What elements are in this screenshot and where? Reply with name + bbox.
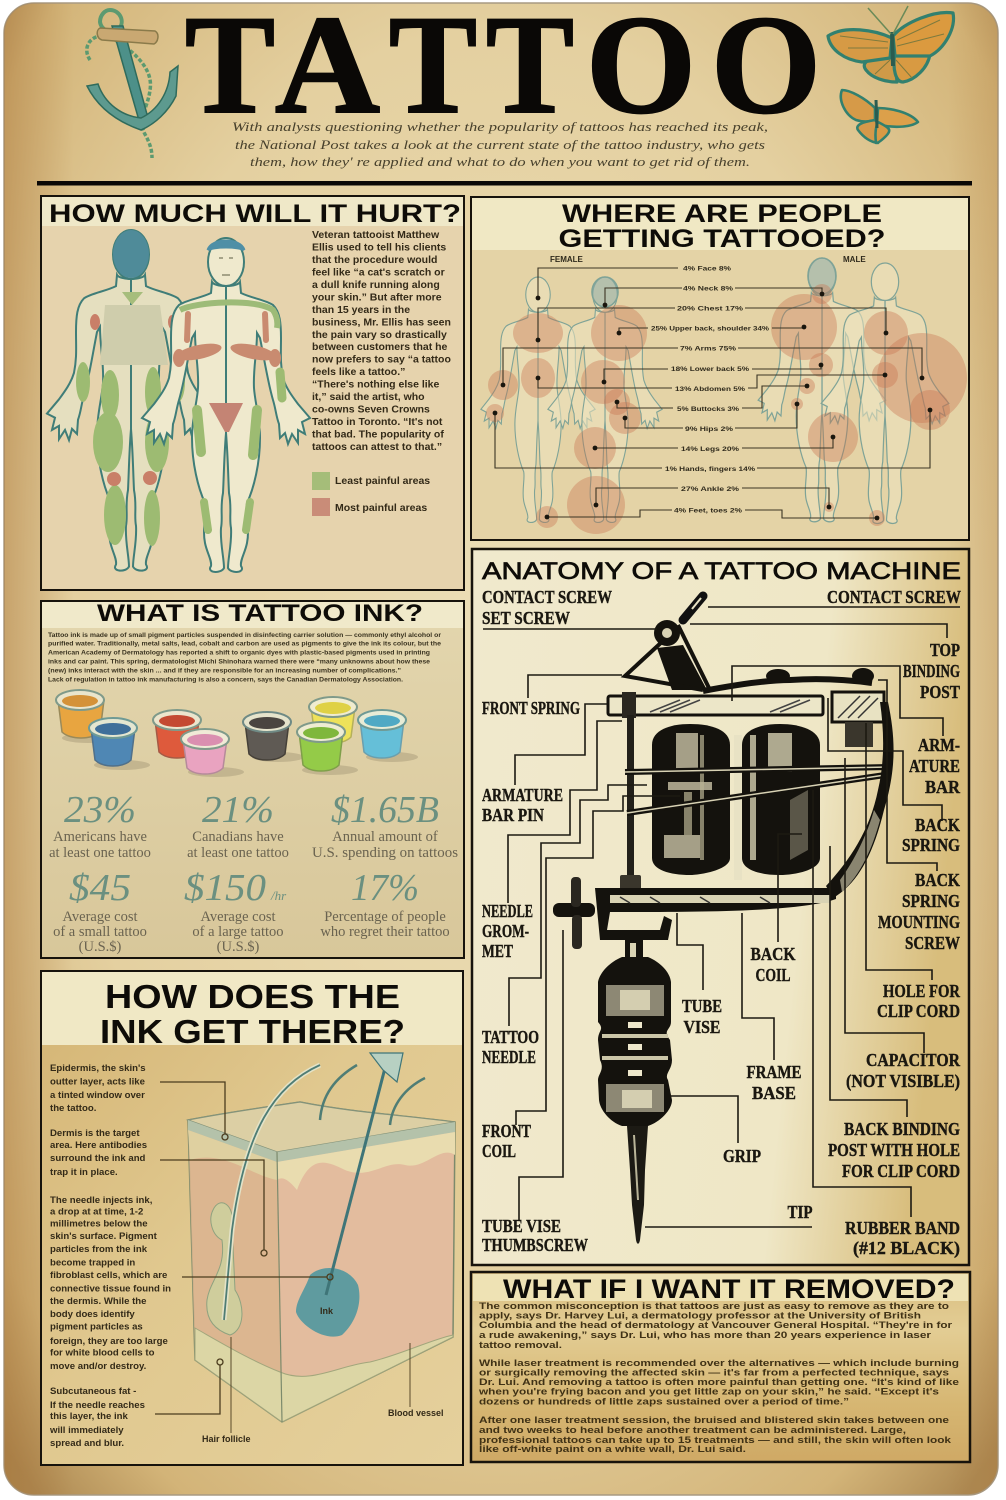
legend <box>312 472 430 516</box>
part labels: left: NEEDLE <box>482 901 533 921</box>
stat: 45 dollars <box>53 867 147 955</box>
removal text: Columbia and the head of dermatology at Vancouver General Hospital. “They're in for <box>479 1320 953 1330</box>
callout: skin layer descriptions: The needle injects ink, <box>50 1195 153 1206</box>
legend: Most painful areas <box>335 502 427 514</box>
callout: skin layer descriptions: this layer, the ink <box>50 1411 129 1422</box>
removal text: After one laser treatment session, the bruised and blistered skin takes between one <box>479 1415 949 1425</box>
icon: small butterfly <box>841 90 918 143</box>
text: veteran tattooist: between customers that he <box>312 341 448 353</box>
text: veteran tattooist: co-owns Seven Crowns <box>312 404 430 416</box>
tube stem <box>625 940 643 960</box>
part labels: right: SPRING <box>902 835 960 855</box>
part labels: right: CAPACITOR <box>866 1050 961 1070</box>
stat: 1.65 billion: U.S. spending on tattoos <box>312 845 458 861</box>
part labels: left <box>482 587 612 1255</box>
part labels: right: POST WITH HOLE <box>828 1140 960 1160</box>
callout: skin layer descriptions: a tinted window over <box>50 1090 145 1101</box>
callout: skin layer descriptions: trap it in place. <box>50 1167 118 1178</box>
callout: skin layer descriptions: surround the ink and <box>50 1153 146 1164</box>
part labels: right: BINDING <box>903 661 960 681</box>
part labels: right: (#12 BLACK) <box>853 1238 960 1259</box>
table labels: 4% Neck 8% <box>683 286 733 292</box>
pot: pink <box>181 729 244 777</box>
pot: cyan <box>358 710 418 762</box>
callout: skin layer descriptions: Epidermis, the skin's <box>50 1063 146 1074</box>
stat: 17 percent <box>320 867 450 940</box>
part labels: right: ATURE <box>909 756 960 776</box>
subtitle: With analysts questioning whether the popularity of tattoos has reached its peak, <box>232 119 768 134</box>
part labels: left: TUBE VISE <box>482 1216 561 1236</box>
text: veteran tattooist: tattoos can attest to that.” <box>312 441 442 453</box>
part labels: left: NEEDLE <box>482 1047 536 1067</box>
callout: skin layer descriptions: connective tissue found in <box>50 1284 171 1294</box>
callout: skin layer descriptions: millimetres below the <box>50 1218 148 1230</box>
table labels: 4% Feet, toes 2% <box>674 508 742 514</box>
stat: 45 dollars: of a small tattoo <box>53 924 147 940</box>
stat: 21 percent <box>187 789 289 861</box>
gender labels <box>550 255 866 264</box>
part labels: right: BAR <box>925 777 961 797</box>
text: veteran tattooist: your skin.” But after more <box>312 291 442 303</box>
back block <box>832 692 884 722</box>
part labels: left: GROM- <box>482 921 529 941</box>
removal text: tattoo removal. <box>479 1340 562 1350</box>
leader lines <box>483 607 960 1227</box>
pot: yellow <box>309 697 357 743</box>
panel: how much will it hurt <box>41 196 464 590</box>
icon: ink pots <box>56 690 418 777</box>
table labels: 9% Hips 2% <box>685 426 733 433</box>
stat: 1.65 billion: Annual amount of <box>332 829 438 845</box>
text: veteran tattooist: business, Mr. Ellis has seen <box>312 316 451 328</box>
table labels: 20% Chest 17% <box>677 306 743 312</box>
stat: 21 percent: 21% <box>202 789 274 831</box>
title <box>185 0 821 143</box>
panel: what is tattoo ink <box>41 600 464 958</box>
text: veteran tattooist: Tattoo in Toronto. “It's not <box>312 416 443 428</box>
callout: skin layer descriptions: fibroblast cells, which are <box>50 1270 167 1281</box>
callout: skin layer descriptions: If the needle reaches <box>50 1400 145 1411</box>
part labels: left: TATTOO <box>482 1027 539 1047</box>
callout: skin layer descriptions: particles from the ink <box>50 1244 148 1255</box>
panel: what if i want it removed <box>471 1272 970 1462</box>
text: veteran tattooist: than 15 years in the <box>312 304 410 316</box>
text: veteran tattooist: that bad. The popularity of <box>312 428 444 440</box>
gender labels: FEMALE <box>550 255 584 264</box>
tattoo machine illustration <box>553 596 894 1244</box>
stat: 23 percent: 23% <box>64 789 136 831</box>
subtitle: them, how they' re applied and what to do when you want to get rid of them. <box>250 154 750 169</box>
stat: 23 percent: at least one tattoo <box>49 845 151 861</box>
skin cross-section <box>188 1053 455 1422</box>
part labels: center: TIP <box>788 1202 812 1222</box>
leader lines <box>495 268 930 518</box>
stat: 1.65 billion: $1.65B <box>331 789 439 831</box>
labels: ink, follicle, vessel <box>202 1306 444 1444</box>
stat: 150 dollars per hour: (U.S.$) <box>217 939 260 955</box>
figure: front view body <box>142 238 310 572</box>
part labels: left: MET <box>482 941 513 961</box>
subtitle <box>232 119 768 169</box>
part labels: left: FRONT SPRING <box>482 698 580 718</box>
part labels: center: COIL <box>756 965 790 985</box>
stat: 17 percent: Percentage of people <box>324 909 446 925</box>
front post <box>627 715 634 880</box>
part labels: left: SET SCREW <box>482 608 570 628</box>
needle <box>326 1068 385 1295</box>
removal text: and two weeks to heal before another treatment can be administered. Large, <box>479 1425 906 1435</box>
removal text: While laser treatment is recommended over the alternatives — which include burning <box>479 1358 959 1368</box>
callout: skin layer descriptions: outter layer, acts like <box>50 1076 145 1088</box>
pot: orange <box>56 690 114 743</box>
removal text: a rude awakening,” says Dr. Lui, who has more than 20 years experience in laser <box>479 1330 932 1340</box>
armature spring <box>703 679 872 691</box>
bands <box>625 767 890 813</box>
removal text: Dr. Lui. And removing a tattoo is often more painful than getting one. “It's kind of like <box>479 1377 959 1387</box>
text: veteran tattooist <box>312 229 451 453</box>
part labels: left: FRONT <box>482 1121 531 1141</box>
callout: skin layer descriptions: Subcutaneous fat - <box>50 1386 136 1397</box>
part labels: right: BACK <box>915 870 960 890</box>
icon: large butterfly <box>828 6 953 82</box>
table labels: 14% Legs 20% <box>681 446 739 453</box>
callout: skin layer descriptions: foreign, they are too large <box>50 1336 168 1347</box>
text: veteran tattooist: that the procedure would <box>312 254 437 266</box>
callout: skin layer descriptions: the dermis. While the <box>50 1296 146 1307</box>
part labels: right: SPRING <box>902 891 960 911</box>
panel: where are people getting tattooed <box>471 197 969 540</box>
part labels: right: ARM- <box>918 735 960 755</box>
part labels: right: BACK BINDING <box>844 1119 960 1139</box>
top bar <box>608 696 823 715</box>
heading: anatomy: ANATOMY OF A TATTOO MACHINE <box>482 558 961 585</box>
stat: 23 percent <box>49 789 151 861</box>
gender labels: MALE <box>843 255 866 264</box>
callout: skin layer descriptions <box>49 1063 171 1449</box>
text: veteran tattooist: Veteran tattooist Matthew <box>312 229 440 241</box>
heading: where are people <box>558 200 886 253</box>
text: veteran tattooist: “There's nothing else like <box>312 379 440 391</box>
labels: ink, follicle, vessel: Hair follicle <box>202 1434 251 1444</box>
grip <box>598 957 672 1126</box>
subtitle: the National Post takes a look at the current state of the tattoo industry, who gets <box>235 137 765 152</box>
subcutaneous fat <box>195 1328 453 1422</box>
text: veteran tattooist: feels like a tattoo.” <box>312 366 405 378</box>
callout: skin layer descriptions: become trapped in <box>50 1258 135 1268</box>
callout: skin layer descriptions: a drop at at time, 1-2 <box>50 1206 143 1218</box>
heat circles <box>486 284 967 534</box>
endpoint dots <box>493 292 932 520</box>
back crescent frame <box>826 702 894 898</box>
callout: skin layer descriptions: area. Here antibodies <box>50 1140 147 1151</box>
text: veteran tattooist: the pain vary so drastically <box>312 329 447 341</box>
part labels: right: TOP <box>930 640 960 660</box>
removal text: like off-white paint on a white wall, Dr. Lui said. <box>479 1444 746 1454</box>
text: veteran tattooist: a dull knife running along <box>312 279 440 291</box>
part labels: right: FOR CLIP CORD <box>842 1161 960 1181</box>
stat: 21 percent: Canadians have <box>192 829 284 845</box>
part labels: right: CONTACT SCREW <box>827 587 961 607</box>
callout: skin layer descriptions: Dermis is the target <box>50 1128 140 1139</box>
table labels: 4% Face 8% <box>683 266 731 272</box>
ink blob <box>296 1268 359 1337</box>
part labels: center: VISE <box>684 1017 720 1037</box>
contact screw <box>683 596 703 620</box>
callout: skin layer descriptions: the tattoo. <box>50 1103 96 1114</box>
table labels: 25% Upper back, shoulder 34% <box>651 326 769 332</box>
table labels: 5% Buttocks 3% <box>677 406 739 413</box>
table labels: 18% Lower back 5% <box>671 366 749 373</box>
table labels: 13% Abdomen 5% <box>675 386 745 393</box>
part labels: center: BACK <box>750 944 796 964</box>
text: veteran tattooist: feel like “a cat's scratch or <box>312 266 445 278</box>
callout: skin layer descriptions: spread and blur. <box>50 1438 124 1449</box>
part labels: right: CLIP CORD <box>877 1001 960 1021</box>
figure: back view body <box>47 230 215 571</box>
figures: body outlines <box>481 258 949 523</box>
part labels: right: HOLE FOR <box>883 981 961 1001</box>
vertical skin edge <box>277 1152 282 1422</box>
pot: green <box>297 722 358 775</box>
panel: how does the ink get there <box>41 971 463 1465</box>
removal text: when you're frying bacon and you get little zap on your skin,” he said. “Except it's <box>478 1386 939 1396</box>
heading: how does the ink <box>100 978 405 1050</box>
part labels: right: MOUNTING <box>878 912 960 932</box>
table labels: 27% Ankle 2% <box>681 486 739 493</box>
part labels: left: COIL <box>482 1141 516 1161</box>
frame base <box>595 888 836 940</box>
callout: skin layer descriptions: will immediately <box>49 1425 124 1436</box>
stat: 17 percent: who regret their tattoo <box>320 924 450 940</box>
part labels: left: BAR PIN <box>482 805 544 825</box>
top epidermis face <box>188 1102 455 1152</box>
pot: red <box>153 710 201 758</box>
table labels <box>651 266 769 514</box>
part labels: right: RUBBER BAND <box>845 1218 960 1238</box>
stat: 45 dollars: $45 <box>69 867 131 909</box>
removal text: professional tattoos can take up to 15 treatments — and still, the skin will often look <box>479 1435 952 1445</box>
stat: 21 percent: at least one tattoo <box>187 845 289 861</box>
heading: how much will it hurt: HOW MUCH WILL IT HURT? <box>49 200 461 228</box>
text: veteran tattooist: it,” said the artist, who <box>312 391 425 403</box>
ink description: American Academy of Dermatology has reported a shift to organic dyes with plastic-based pigments used in printing <box>48 650 430 656</box>
stat: 1.65 billion <box>312 789 458 861</box>
stat: 150 dollars per hour: $150 <box>184 867 266 909</box>
heading: where are people: GETTING TATTOOED? <box>558 225 886 253</box>
removal text: apply, says Dr. Harvey Lui, a dermatology professor at the University of British <box>479 1310 921 1320</box>
part labels: center: BASE <box>752 1083 796 1103</box>
hairs <box>224 1065 320 1320</box>
pot: dark <box>243 712 304 762</box>
callout lines <box>155 1082 410 1433</box>
pivot and front block <box>657 645 707 690</box>
removal text: dozens or hundreds of little zaps sustained over a period of time.” <box>479 1396 849 1406</box>
stat: 150 dollars per hour: /hr <box>270 888 287 903</box>
needle taper <box>627 1126 648 1244</box>
epidermis strip <box>188 1120 455 1162</box>
ink description: purified water. Traditionally, metal salts, lead, cobalt and carbon are used as pigments to give the ink its colour, but the <box>48 640 442 648</box>
callout: skin layer descriptions: pigment particles as <box>50 1322 143 1332</box>
stat: 150 dollars per hour: Average cost <box>200 909 276 925</box>
ink description: (new) inks interact with the skin ... and if they are responsible for an increasing number of complications.” <box>48 668 401 674</box>
removal text: The common misconception is that tattoos are just as easy to remove as they are to <box>479 1301 949 1311</box>
callout: skin layer descriptions: skin's surface. Pigment <box>50 1231 158 1242</box>
heading: removed: WHAT IF I WANT IT REMOVED? <box>503 1274 955 1304</box>
part labels: left: ARMATURE <box>482 785 563 805</box>
stat: 150 dollars per hour <box>184 867 287 955</box>
left coil <box>652 724 730 875</box>
part labels: center: TUBE <box>682 996 722 1016</box>
divider bar <box>37 181 972 186</box>
callout: skin layer descriptions: move and/or destroy. <box>50 1361 146 1372</box>
part labels: center: GRIP <box>723 1146 761 1166</box>
labels: ink, follicle, vessel: Blood vessel <box>388 1408 444 1418</box>
stratum dotted layer <box>277 1132 455 1190</box>
text: veteran tattooist: now prefers to say “a tattoo <box>312 354 451 366</box>
stat: 150 dollars per hour: of a large tattoo <box>192 924 284 940</box>
heading: where are people: WHERE ARE PEOPLE <box>562 200 882 228</box>
panel: anatomy of a tattoo machine <box>472 549 969 1265</box>
stat: 45 dollars: Average cost <box>62 909 138 925</box>
legend: Least painful areas <box>335 475 430 487</box>
heading: how does the ink: INK GET THERE? <box>100 1013 405 1050</box>
heading: what is tattoo ink: WHAT IS TATTOO INK? <box>97 600 423 627</box>
ink description: inks and car paint. This spring, dermatologist Michi Shinohara warned there were “many unknowns about how these <box>48 658 431 666</box>
part labels: right: (NOT VISIBLE) <box>846 1071 960 1092</box>
part labels: left: THUMBSCREW <box>482 1235 588 1255</box>
thumbscrew knob <box>553 903 595 917</box>
stat: 23 percent: Americans have <box>53 829 147 845</box>
icon: anchor <box>87 10 178 158</box>
ink description: Lack of regulation in tattoo ink manufacturing is also a concern, says the Canadian Dermatology Association. <box>48 676 403 684</box>
labels: ink, follicle, vessel: Ink <box>320 1306 334 1316</box>
hair follicle <box>207 1203 242 1335</box>
part labels: right: POST <box>920 682 960 702</box>
text: veteran tattooist: Ellis used to tell his clients <box>312 242 446 254</box>
pot: blue <box>89 718 150 770</box>
part labels: right: BACK <box>915 815 960 835</box>
removal text: or surgically removing the affected skin — it's far from a perfected technique, says <box>479 1368 949 1378</box>
stat: 45 dollars: (U.S.$) <box>79 939 122 955</box>
callout: skin layer descriptions: body does identify <box>50 1309 135 1320</box>
stat: 17 percent: 17% <box>351 867 419 909</box>
table labels: 7% Arms 75% <box>680 346 736 352</box>
table labels: 1% Hands, fingers 14% <box>665 466 755 473</box>
part labels: right <box>827 587 961 1259</box>
part labels: left: CONTACT SCREW <box>482 587 612 607</box>
removal text <box>478 1301 959 1454</box>
part labels: center: FRAME <box>746 1062 802 1082</box>
part labels: right: SCREW <box>905 933 960 953</box>
callout: skin layer descriptions: for white blood cells to <box>50 1348 155 1358</box>
ink description <box>48 632 442 684</box>
right coil <box>742 724 820 875</box>
part labels: center <box>682 944 812 1222</box>
ink description: Tattoo ink is made up of small pigment particles suspended in disinfecting carrier solution — commonly ethyl alcohol or <box>48 632 442 639</box>
heading: how does the ink: HOW DOES THE <box>105 978 400 1015</box>
